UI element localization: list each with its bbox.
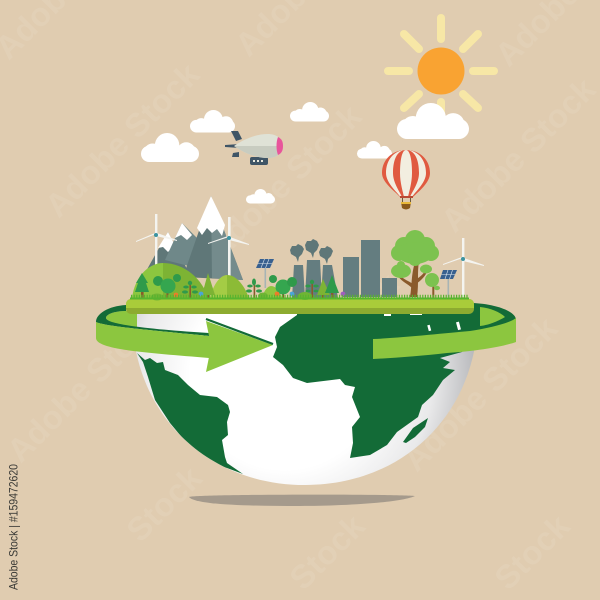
factory smoke — [290, 239, 333, 264]
hot air balloon — [382, 150, 430, 210]
cloud: upper centre — [290, 102, 329, 122]
city buildings — [343, 240, 397, 297]
cloud: large under sun — [397, 103, 469, 139]
watermark pattern: Stock — [487, 507, 577, 597]
stock id caption: Adobe Stock | #159472620 — [6, 464, 20, 590]
cloud: beside balloon — [357, 141, 392, 158]
mountain: small left — [145, 232, 190, 275]
hill: left — [132, 263, 208, 298]
watermark pattern: Adobe Stock — [237, 265, 407, 434]
mountain: middle — [165, 223, 205, 270]
watermark pattern: Adobe Stock — [199, 97, 369, 266]
watermark pattern: Adobe Stock — [395, 309, 565, 478]
watermark pattern: Adobe Stock — [37, 55, 207, 224]
arrow head — [206, 319, 273, 372]
airship — [225, 131, 283, 165]
cloud: above mountain — [246, 189, 275, 204]
watermark pattern: Adobe Stock — [433, 70, 600, 239]
solar panel: right — [440, 270, 457, 297]
pine trees: beside factory — [317, 275, 339, 299]
solar panel: left — [256, 259, 274, 288]
round tree cluster: left — [153, 274, 181, 298]
branch plant: right — [305, 280, 319, 298]
pine tree: dark — [135, 273, 149, 298]
big tree — [391, 230, 439, 297]
turbine: middle — [208, 217, 249, 277]
ring: front right band — [373, 318, 516, 359]
globe hemisphere — [132, 312, 478, 485]
branch plant: left — [182, 281, 198, 298]
platform — [126, 299, 474, 314]
grass strip — [130, 296, 469, 300]
continent: europe and africa — [273, 312, 477, 458]
cloud: above airship — [190, 110, 235, 132]
hill: middle — [210, 275, 249, 298]
ground shadow — [189, 495, 415, 506]
bushes and flowers — [151, 292, 345, 300]
ring: back left — [96, 305, 209, 336]
mountain: big — [183, 196, 243, 280]
watermark pattern: Stock — [282, 507, 372, 597]
ring: back right — [470, 303, 516, 336]
round tree cluster: right — [269, 275, 297, 298]
watermark pattern: Adobe Stock — [0, 300, 169, 469]
hill: small — [262, 286, 282, 298]
watermark pattern: Stock — [119, 459, 209, 549]
sun — [388, 18, 494, 112]
cloud: far left — [141, 133, 199, 162]
factory cooling towers — [292, 260, 338, 298]
turbine: right — [443, 238, 484, 297]
branch plant: middle — [246, 278, 262, 298]
pine tree: light — [202, 273, 215, 299]
ring: front left band — [96, 322, 209, 358]
island: madagascar — [403, 418, 428, 443]
continent: americas — [137, 353, 243, 474]
turbine: left — [136, 214, 177, 266]
small tree — [425, 273, 440, 298]
landscape on platform — [130, 196, 484, 300]
